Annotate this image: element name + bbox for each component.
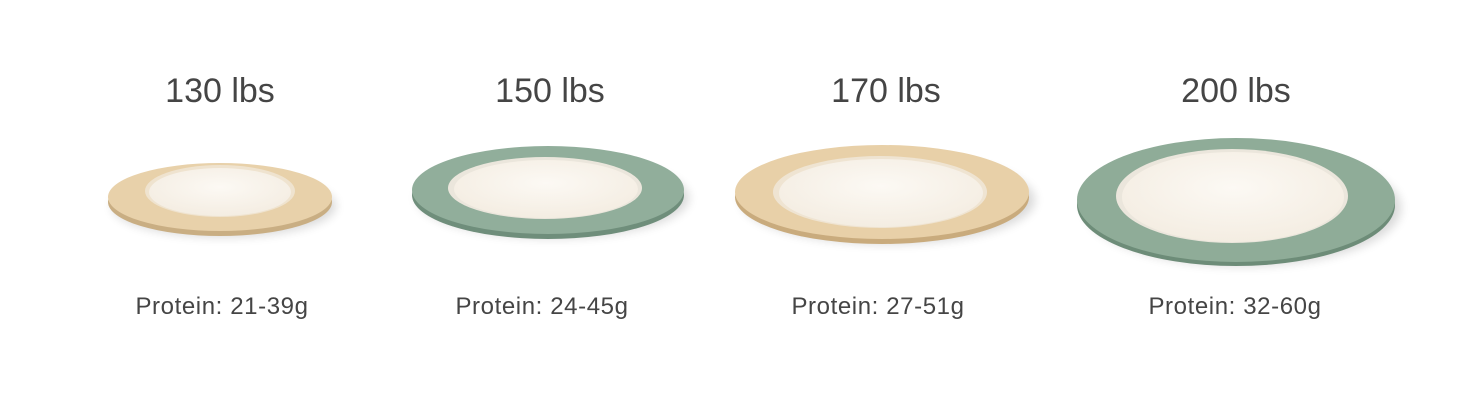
label: 130 lbs: 130 lbs (165, 72, 275, 110)
protein: 150: Protein: 24-45g (455, 293, 629, 320)
plate: 200 lbs (1077, 138, 1401, 266)
label: 200 lbs: 200 lbs (1181, 72, 1291, 110)
label: 170 lbs: 170 lbs (831, 72, 941, 110)
plate: 170 lbs (735, 145, 1035, 244)
label: 150 lbs: 150 lbs (495, 72, 605, 110)
protein: 200: Protein: 32-60g (1148, 293, 1322, 320)
plate: 150 lbs (412, 146, 689, 239)
protein: 170: Protein: 27-51g (791, 293, 965, 320)
plate: 130 lbs (108, 163, 336, 237)
protein: 130: Protein: 21-39g (135, 293, 309, 320)
